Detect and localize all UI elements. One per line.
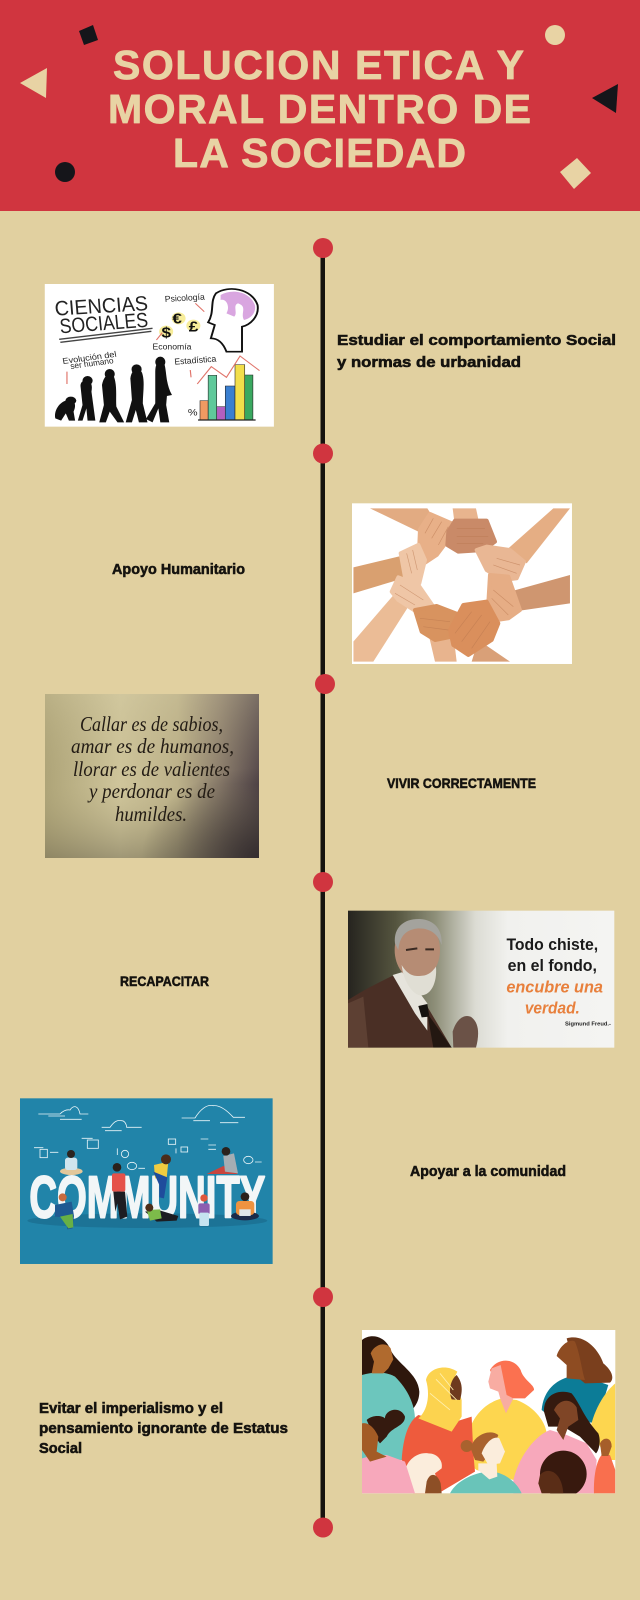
- image: ciencias sociales: [45, 284, 274, 427]
- image: ciencias sociales: SOCIALES: [58, 308, 149, 338]
- text: apoyo humanitario: Apoyo Humanitario: [112, 561, 245, 578]
- quote text: en el fondo,: [508, 956, 597, 975]
- woman with cream hair: [405, 1453, 442, 1493]
- title: SOLUCION ETICA Y: [113, 42, 524, 88]
- woman in pink: [513, 1392, 600, 1493]
- icon: beige diamond: [560, 158, 591, 189]
- image: quote callar es de sabios: [45, 694, 259, 858]
- icon: human evolution silhouettes: [55, 357, 172, 422]
- icon: black square: [79, 25, 98, 45]
- people: [55, 1147, 259, 1229]
- text: estudiar: [337, 332, 616, 371]
- woman with bun: [450, 1432, 522, 1493]
- quote text: Callar es de sabios,: [80, 712, 223, 736]
- image: ciencias sociales: ser humano: [70, 356, 114, 371]
- text: evitar el imperialismo: Evitar el imperialismo y el: [39, 1400, 223, 1417]
- quote text: llorar es de valientes: [73, 757, 230, 781]
- floating icons: [34, 1138, 262, 1170]
- clouds: [38, 1105, 245, 1131]
- title: LA SOCIEDAD: [173, 130, 466, 176]
- icon: currency symbols: £: [189, 319, 198, 335]
- icon: currency symbols: [159, 311, 200, 341]
- quote text: encubre una: [506, 977, 603, 996]
- icon: black triangle: [592, 84, 618, 113]
- text: estudiar: y normas de urbanidad: [337, 354, 521, 371]
- icon: head with brain: [208, 289, 258, 352]
- woman with long dark hair: [362, 1336, 419, 1460]
- quote text: Todo chiste,: [506, 935, 598, 954]
- header banner: [0, 0, 640, 211]
- image: freud quote: [348, 911, 614, 1048]
- icon: currency symbols: $: [161, 326, 171, 341]
- icon: beige triangle: [20, 68, 47, 98]
- arms: [353, 508, 570, 662]
- woman in hijab: [402, 1368, 475, 1493]
- image: linked hands: [352, 503, 572, 664]
- finger lines: [395, 518, 520, 648]
- timeline: [313, 238, 335, 1538]
- woman yellow right: [591, 1383, 615, 1460]
- quote text: [71, 712, 234, 826]
- bar chart: [197, 356, 260, 420]
- portrait: [348, 919, 478, 1048]
- image: ciencias sociales: Evolución del: [62, 349, 117, 366]
- image: ciencias sociales: Psicología: [164, 291, 206, 304]
- text: evitar el imperialismo: [39, 1400, 288, 1457]
- image: ciencias sociales: Estadística: [174, 353, 217, 366]
- image: ciencias sociales: CIENCIAS: [54, 292, 149, 320]
- icon: currency symbols: €: [172, 311, 182, 327]
- image: diverse women: [362, 1330, 615, 1497]
- text: apoyar a la comunidad: Apoyar a la comunidad: [410, 1163, 566, 1180]
- title: MORAL DENTRO DE: [108, 86, 531, 132]
- quote text: y perdonar es de: [87, 779, 215, 803]
- raised arm: [594, 1439, 615, 1493]
- quote text: amar es de humanos,: [71, 734, 234, 758]
- hands: [392, 514, 524, 655]
- text: evitar el imperialismo: Social: [39, 1440, 82, 1457]
- icon: black circle: [55, 162, 75, 182]
- image: ciencias sociales: %: [188, 408, 198, 418]
- word community: COMMUNITY: [29, 1164, 265, 1231]
- image: ciencias sociales: Economía: [153, 341, 192, 351]
- quote text: Sigmund Freud.-: [565, 1021, 611, 1027]
- text: estudiar: Estudiar el comportamiento Social: [337, 332, 616, 349]
- text: vivir correctamente: VIVIR CORRECTAMENTE: [387, 775, 536, 791]
- icon: beige circle: [545, 25, 565, 45]
- woman top right: [542, 1337, 612, 1423]
- quote text: humildes.: [115, 802, 187, 826]
- woman with hair bun bottom left: [362, 1410, 415, 1493]
- text: evitar el imperialismo: pensamiento ignorante de Estatus: [39, 1420, 288, 1437]
- image: community: [20, 1098, 273, 1264]
- woman with afro: [538, 1451, 587, 1497]
- woman coral hair: [472, 1360, 546, 1480]
- quote text: [506, 935, 611, 1027]
- title: [108, 42, 531, 176]
- quote text: verdad.: [525, 998, 580, 1017]
- text: recapacitar: RECAPACITAR: [120, 973, 209, 989]
